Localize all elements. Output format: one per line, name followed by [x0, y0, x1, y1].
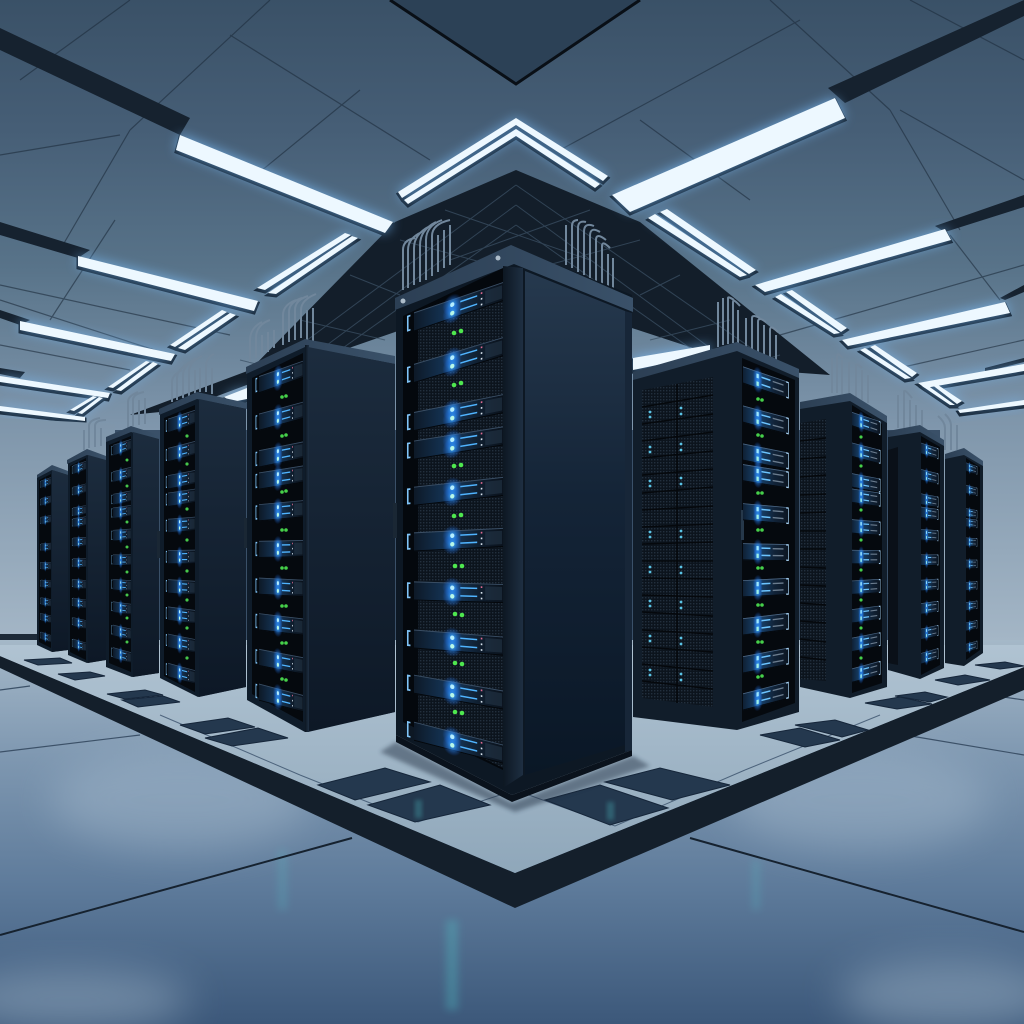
rack A: [244, 339, 395, 732]
rack body: [396, 246, 632, 795]
rack G: [800, 393, 887, 698]
rack row left, far: rack E: [37, 465, 68, 652]
mesh backing: [418, 282, 503, 768]
cable tray: [130, 170, 830, 415]
rack D: [67, 449, 106, 663]
ceiling centre panel: [390, 0, 640, 84]
mesh door: [642, 377, 713, 707]
server units: [408, 277, 503, 769]
rack row right, far: rack I: [945, 448, 983, 666]
ceiling beams: [0, 0, 1024, 378]
ceiling lights: [0, 98, 1024, 423]
rack B: [157, 392, 247, 697]
back walls: [0, 414, 1024, 646]
floor vents: [24, 658, 1024, 825]
rack C: [106, 426, 159, 677]
overhead cable bundles: [84, 220, 957, 450]
main rack shadow: [380, 742, 650, 812]
side panel: [525, 271, 625, 775]
ceiling: [0, 0, 1024, 430]
floor: [0, 640, 1024, 1024]
rack top cap: [395, 245, 633, 312]
rack logos: [400, 298, 406, 304]
rack H: [888, 425, 944, 679]
corner post: [503, 266, 523, 788]
green status LEDs: [452, 329, 464, 715]
rack F: [633, 342, 799, 730]
raised platform: [0, 645, 1024, 908]
main server rack: [393, 245, 633, 802]
door opening: [403, 268, 503, 770]
